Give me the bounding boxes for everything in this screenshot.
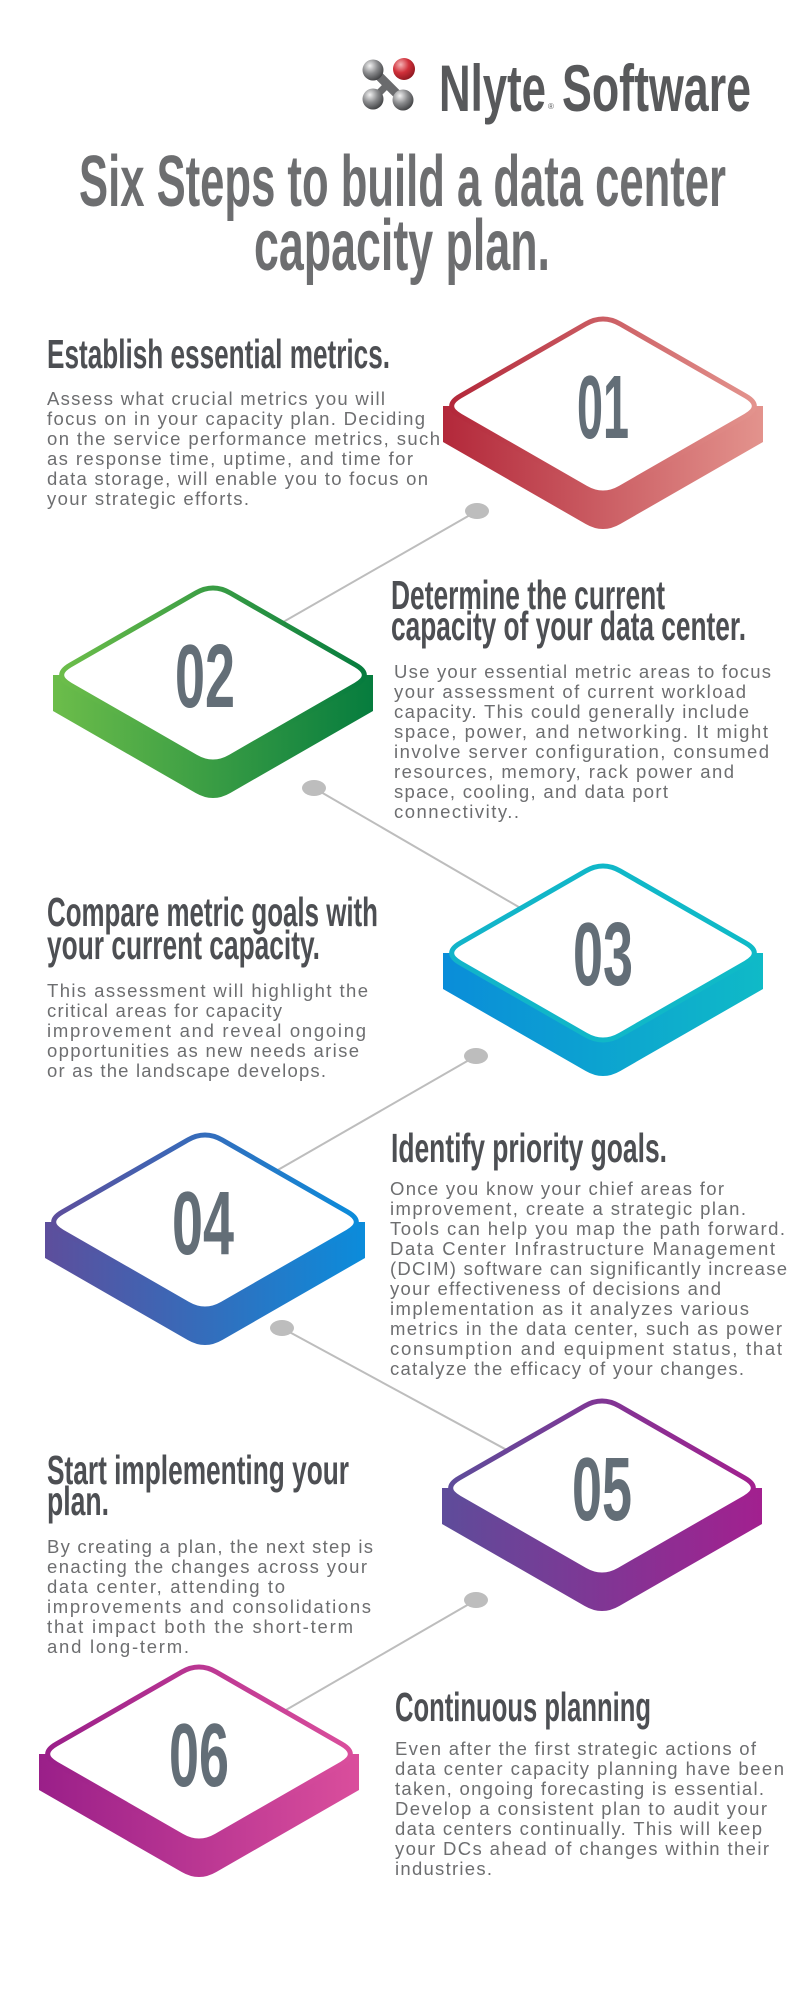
diamond 03: 03 — [573, 905, 633, 1005]
step 1 text: Establish essential metrics. — [47, 331, 390, 377]
logo: Nlyte Software: ® — [548, 102, 554, 111]
step 1 text: Assess what crucial metrics you will — [47, 388, 385, 409]
step 3 text: improvement and reveal ongoing — [47, 1020, 366, 1041]
diamond 06 — [39, 1667, 359, 1877]
step 6 text: Even after the first strategic actions of — [395, 1738, 757, 1759]
step 3 text: your current capacity. — [47, 922, 320, 968]
step 2 text: your assessment of current workload — [394, 681, 746, 702]
step 1 text: as response time, uptime, and time for — [47, 448, 413, 469]
step 6 text: Develop a consistent plan to audit your — [395, 1798, 767, 1819]
step 6 text — [395, 1684, 791, 1879]
step 1 text: data storage, will enable you to focus on — [47, 468, 428, 489]
step 1 text: on the service performance metrics, such — [47, 428, 440, 449]
step 5 text: plan. — [47, 1478, 109, 1524]
step 4 text: your effectiveness of decisions and — [390, 1278, 721, 1299]
step 4 text: improvement, create a strategic plan. — [390, 1198, 746, 1219]
diamond 06: 06 — [169, 1706, 229, 1806]
step 4 text: consumption and equipment status, that — [390, 1338, 782, 1359]
step 2 text: involve server configuration, consumed — [394, 741, 769, 762]
step 4 text: Tools can help you map the path forward. — [390, 1218, 785, 1239]
step 4 text: metrics in the data center, such as power — [390, 1318, 782, 1339]
logo: Nlyte Software: Nlyte — [439, 51, 546, 125]
diamond 01 — [443, 319, 763, 529]
step 5 text — [47, 1447, 379, 1657]
step 3 text: Compare metric goals with — [47, 889, 378, 935]
diamond 02 — [53, 588, 373, 798]
icon: molecule — [362, 58, 415, 110]
step 1 text — [47, 331, 447, 509]
step 5 text: that impact both the short-term — [47, 1616, 353, 1637]
connector lines — [250, 503, 560, 1725]
diamond 01: 01 — [577, 358, 629, 458]
logo: Nlyte Software — [362, 51, 751, 125]
title — [79, 142, 726, 286]
step 6 text: your DCs ahead of changes within their — [395, 1838, 769, 1859]
step 6 text: industries. — [395, 1858, 492, 1879]
step 4 text: Data Center Infrastructure Management — [390, 1238, 775, 1259]
step 6 text: data center capacity planning have been — [395, 1758, 784, 1779]
diamond 03 — [443, 866, 763, 1076]
step 4 text — [390, 1125, 793, 1379]
step 4 text: implementation as it analyzes various — [390, 1298, 749, 1319]
step 1 text: your strategic efforts. — [47, 488, 249, 509]
step 3 text: opportunities as new needs arise — [47, 1040, 359, 1061]
step 6 text: taken, ongoing forecasting is essential. — [395, 1778, 764, 1799]
step 4 text: catalyze the efficacy of your changes. — [390, 1358, 744, 1379]
step 6 text: Continuous planning — [395, 1684, 651, 1730]
step 4 text: Once you know your chief areas for — [390, 1178, 724, 1199]
title: capacity plan. — [254, 206, 550, 286]
step 3 text — [47, 889, 378, 1081]
step 2 text: connectivity.. — [394, 801, 519, 822]
step 2 text: space, power, and networking. It might — [394, 721, 768, 742]
step 1 text: focus on in your capacity plan. Deciding — [47, 408, 425, 429]
diamond 04: 04 — [172, 1174, 234, 1274]
diamond 05 — [442, 1401, 762, 1611]
step 4 text: (DCIM) software can significantly increase — [390, 1258, 787, 1279]
step 2 text: resources, memory, rack power and — [394, 761, 734, 782]
step 5 text: and long-term. — [47, 1636, 189, 1657]
step 5 text: By creating a plan, the next step is — [47, 1536, 373, 1557]
step 2 text: space, cooling, and data port — [394, 781, 668, 802]
step 3 text: critical areas for capacity — [47, 1000, 283, 1021]
step 5 text: enacting the changes across your — [47, 1556, 367, 1577]
step 2 text: capacity. This could generally include — [394, 701, 749, 722]
diamond 02: 02 — [175, 627, 235, 727]
step 5 text: improvements and consolidations — [47, 1596, 371, 1617]
step 2 text: Use your essential metric areas to focus — [394, 661, 771, 682]
step 2 text — [391, 572, 777, 822]
diamond 05: 05 — [572, 1440, 632, 1540]
step 3 text: This assessment will highlight the — [47, 980, 368, 1001]
step 5 text: data center, attending to — [47, 1576, 285, 1597]
step 5 text: Start implementing your — [47, 1447, 349, 1493]
step 3 text: or as the landscape develops. — [47, 1060, 326, 1081]
diamond 04 — [45, 1135, 365, 1345]
step 6 text: data centers continually. This will keep — [395, 1818, 762, 1839]
